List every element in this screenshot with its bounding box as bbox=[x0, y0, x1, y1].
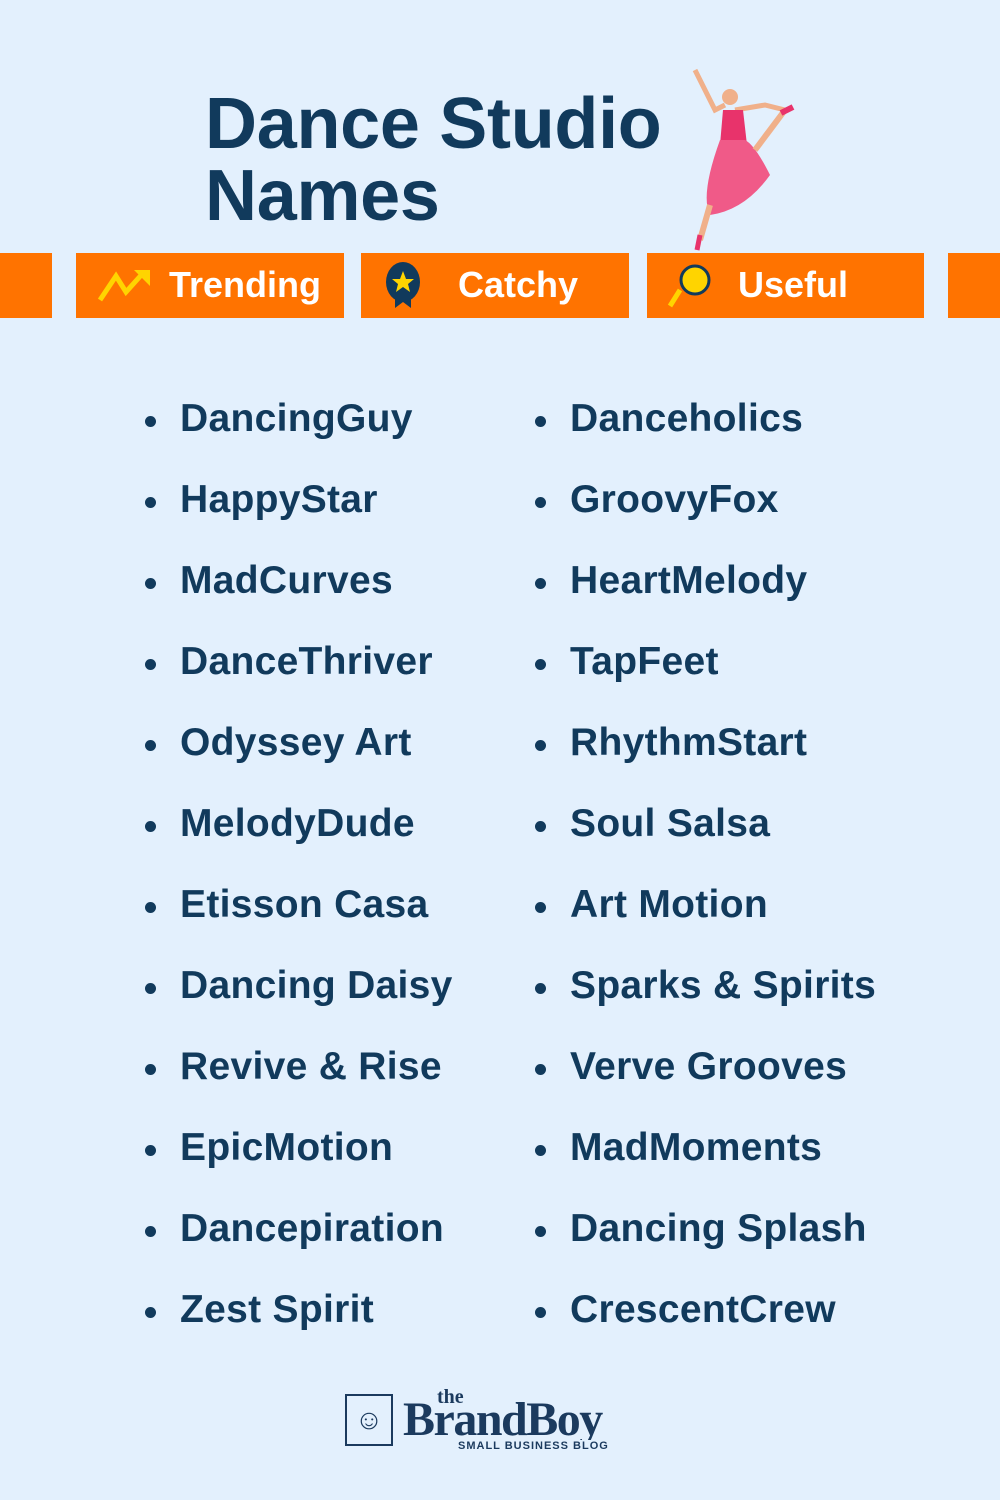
list: right column: GroovyFox bbox=[570, 478, 779, 521]
logo: the BrandBoy: ☺ bbox=[355, 1404, 383, 1435]
logo: the BrandBoy: the bbox=[437, 1386, 464, 1408]
list: right column: Art Motion bbox=[570, 883, 768, 926]
list: right column: Sparks & Spirits bbox=[570, 964, 876, 1007]
list: right column: MadMoments bbox=[570, 1126, 822, 1169]
list: left column: Etisson Casa bbox=[180, 883, 429, 926]
icon: trending arrow bbox=[98, 270, 150, 302]
icon: badge bbox=[386, 262, 420, 308]
title: Dance Studio bbox=[205, 84, 661, 164]
list: left column: Revive & Rise bbox=[180, 1045, 442, 1088]
title: Names bbox=[205, 156, 440, 236]
logo: the BrandBoy bbox=[345, 1386, 609, 1452]
list: left column: MelodyDude bbox=[180, 802, 415, 845]
logo: the BrandBoy: BrandBoy bbox=[403, 1393, 602, 1446]
list: left column: EpicMotion bbox=[180, 1126, 393, 1169]
title bbox=[205, 84, 661, 236]
list: left column: MadCurves bbox=[180, 559, 393, 602]
list: right column: Danceholics bbox=[570, 397, 803, 440]
list: left column: HappyStar bbox=[180, 478, 378, 521]
list: right column: Soul Salsa bbox=[570, 802, 770, 845]
icon: magnifier bbox=[668, 264, 710, 308]
list: right column: TapFeet bbox=[570, 640, 719, 683]
list: left column: Dancepiration bbox=[180, 1207, 444, 1250]
list: left column: DanceThriver bbox=[180, 640, 433, 683]
list: right column: Verve Grooves bbox=[570, 1045, 847, 1088]
list: right column: Dancing Splash bbox=[570, 1207, 867, 1250]
logo: the BrandBoy: SMALL BUSINESS BLOG bbox=[458, 1440, 609, 1452]
text: Catchy: Catchy bbox=[458, 264, 578, 305]
list: right column bbox=[535, 397, 876, 1331]
list: left column bbox=[145, 397, 453, 1331]
list: left column: DancingGuy bbox=[180, 397, 413, 440]
list: right column: HeartMelody bbox=[570, 559, 807, 602]
text: Trending: Trending bbox=[169, 264, 321, 305]
ribbon: left end bbox=[0, 253, 52, 318]
icon: ballerina bbox=[692, 68, 794, 250]
list: right column: CrescentCrew bbox=[570, 1288, 836, 1331]
text: Useful: Useful bbox=[738, 264, 848, 305]
ribbon: right end bbox=[948, 253, 1000, 318]
tag: useful bbox=[647, 253, 924, 318]
list: right column: RhythmStart bbox=[570, 721, 807, 764]
list: left column: Odyssey Art bbox=[180, 721, 412, 764]
list: left column: Dancing Daisy bbox=[180, 964, 453, 1007]
list: left column: Zest Spirit bbox=[180, 1288, 374, 1331]
tag: trending bbox=[76, 253, 344, 318]
tag: catchy bbox=[361, 253, 629, 318]
